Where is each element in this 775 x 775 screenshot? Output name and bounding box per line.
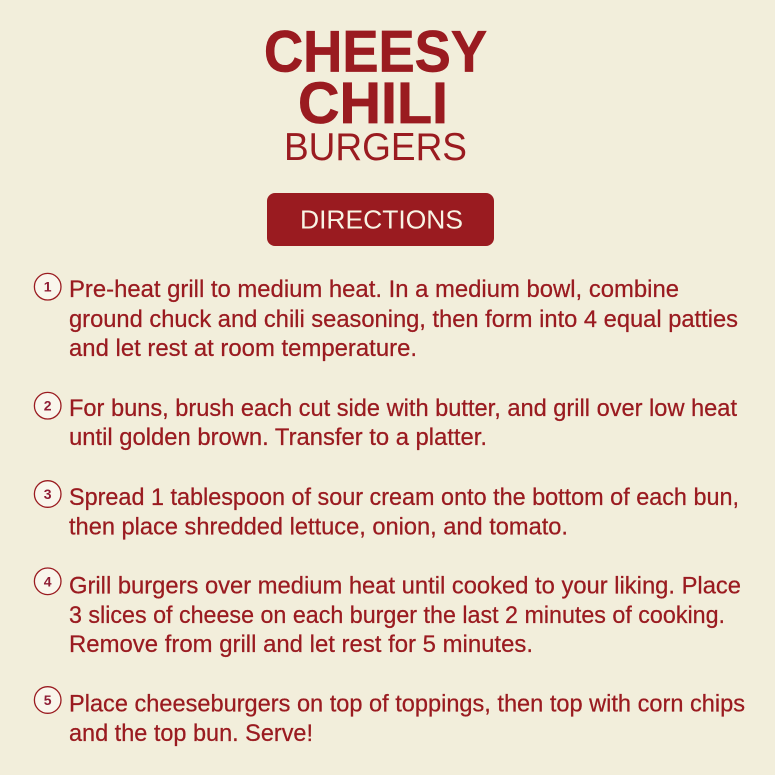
step 1: ground chuck and chili seasoning, then form into 4 equal patties bbox=[69, 306, 738, 333]
step 4: 3 slices of cheese on each burger the last 2 minutes of cooking. bbox=[69, 602, 725, 629]
title: CHILI bbox=[298, 71, 448, 136]
step 3: Spread 1 tablespoon of sour cream onto the bottom of each bun, bbox=[69, 484, 739, 511]
step 4: 4 bbox=[44, 573, 52, 589]
step 2: 2 bbox=[44, 398, 52, 414]
step 1: 1 bbox=[44, 279, 52, 295]
step 2: until golden brown. Transfer to a platter. bbox=[69, 424, 487, 451]
step 2: For buns, brush each cut side with butter, and grill over low heat bbox=[69, 395, 737, 422]
step 3: 3 bbox=[44, 486, 52, 502]
step 1: Pre-heat grill to medium heat. In a medium bowl, combine bbox=[69, 276, 679, 303]
step 3 bbox=[34, 481, 739, 540]
step 4: Remove from grill and let rest for 5 minutes. bbox=[69, 631, 533, 658]
step 5: and the top bun. Serve! bbox=[69, 720, 313, 747]
step 5 bbox=[34, 687, 745, 747]
step 5: 5 bbox=[44, 692, 52, 708]
title: BURGERS bbox=[284, 126, 467, 169]
title: CHEESY bbox=[264, 20, 487, 84]
step 2 bbox=[34, 392, 737, 451]
step 1 bbox=[34, 273, 738, 362]
step 4 bbox=[34, 568, 741, 658]
step 5: Place cheeseburgers on top of toppings, then top with corn chips bbox=[69, 690, 745, 718]
directions button bbox=[267, 193, 494, 246]
directions button: DIRECTIONS bbox=[300, 204, 463, 234]
step 4: Grill burgers over medium heat until cooked to your liking. Place bbox=[69, 572, 741, 600]
step 3: then place shredded lettuce, onion, and tomato. bbox=[69, 514, 568, 540]
title bbox=[264, 20, 487, 169]
step 1: and let rest at room temperature. bbox=[69, 335, 417, 362]
